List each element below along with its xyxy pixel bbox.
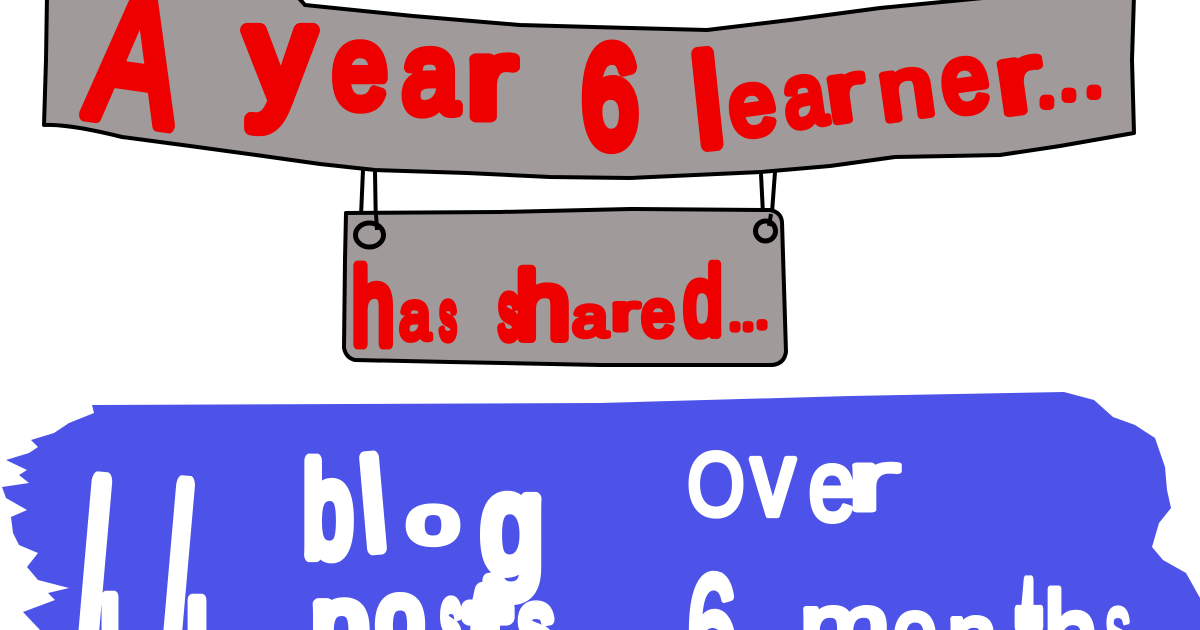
heading: A year 6 learner...: e bbox=[333, 3, 387, 132]
text: blog posts bbox=[303, 435, 553, 630]
banner: main hanging sign bbox=[44, 0, 1134, 178]
heading: A year 6 learner...: e bbox=[934, 23, 995, 135]
heading: A year 6 learner...: . bbox=[1062, 53, 1076, 109]
subheading: has shared...: e bbox=[641, 278, 675, 351]
subheading: has shared...: a bbox=[399, 279, 431, 354]
subheading: has shared...: h bbox=[352, 246, 394, 367]
heading: A year 6 learner...: . bbox=[1040, 60, 1054, 116]
text: Over 6 months: O bbox=[687, 436, 745, 535]
subheading: has shared... bbox=[352, 246, 768, 367]
subheading: has shared...: . bbox=[756, 292, 768, 336]
text: Over 6 months: v bbox=[751, 419, 795, 538]
subheading: has shared...: s bbox=[499, 265, 519, 356]
text: Over 6 months: r bbox=[846, 434, 900, 529]
heading: A year 6 learner...: a bbox=[776, 44, 832, 147]
small sign bbox=[344, 209, 786, 365]
text: blog posts: b bbox=[303, 437, 353, 583]
heading: A year 6 learner...: . bbox=[1087, 50, 1101, 106]
subheading: has shared...: . bbox=[742, 294, 754, 338]
heading: A year 6 learner...: r bbox=[989, 22, 1048, 134]
heading: A year 6 learner...: r bbox=[820, 45, 870, 141]
subheading: has shared...: d bbox=[684, 247, 722, 355]
heading: A year 6 learner...: 6 bbox=[582, 18, 638, 175]
heading: A year 6 learner...: r bbox=[467, 19, 515, 141]
heading: A year 6 learner...: n bbox=[872, 38, 940, 139]
heading: A year 6 learner... bbox=[79, 0, 1101, 175]
text: blog posts: o bbox=[407, 483, 459, 558]
subheading: has shared...: s bbox=[440, 278, 456, 354]
heading: A year 6 learner...: a bbox=[402, 12, 459, 136]
heading: A year 6 learner...: l bbox=[688, 30, 727, 172]
subheading: has shared...: a bbox=[572, 286, 608, 348]
subheading: has shared...: h bbox=[516, 253, 570, 359]
subheading: has shared...: . bbox=[729, 294, 741, 338]
text: blog posts: l bbox=[356, 435, 390, 575]
text: blog posts: g bbox=[481, 449, 543, 598]
hanging strings: left and right bbox=[361, 170, 775, 232]
subheading: has shared...: r bbox=[611, 285, 639, 341]
big number strokes bbox=[78, 471, 206, 630]
text: Over 6 months: e bbox=[809, 429, 855, 542]
sign rings bbox=[356, 214, 776, 247]
panel: blue paint swash bbox=[2, 392, 1200, 630]
heading: A year 6 learner...: e bbox=[722, 51, 782, 157]
text: Over 6 months bbox=[688, 450, 1130, 630]
